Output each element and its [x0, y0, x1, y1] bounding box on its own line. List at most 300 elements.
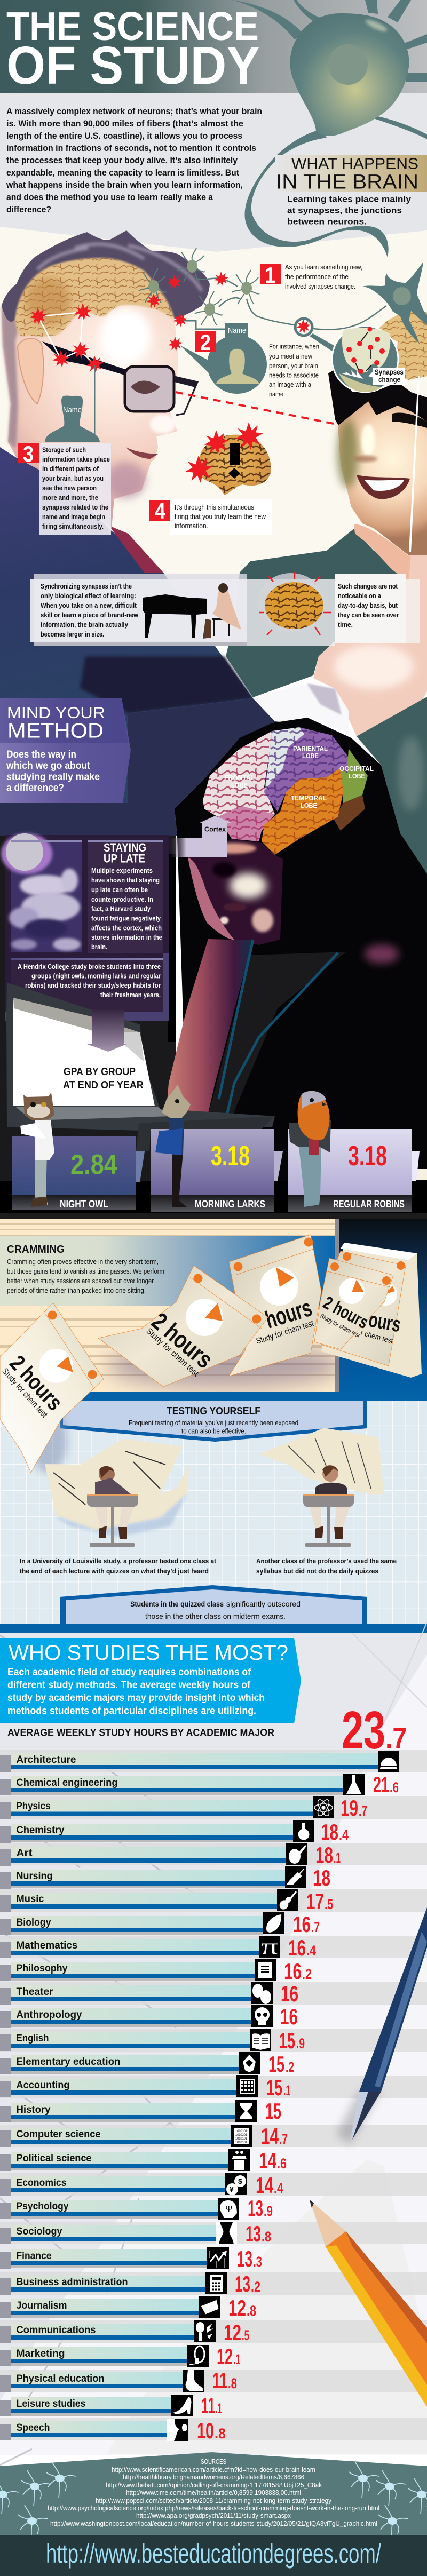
calendar sheet C	[229, 1235, 321, 1376]
teal garment at right	[357, 697, 427, 875]
text: synchronizing synapses: When you take on a new, difficult	[41, 601, 137, 609]
text: such changes: they can be seen over	[338, 611, 399, 619]
bar: Communications 12.5: 12	[224, 2320, 241, 2345]
panel: staying up late: fact, a Harvard study	[91, 905, 151, 912]
bar: English 15.9: English	[16, 2033, 49, 2044]
step 2 text: needs to associate	[269, 371, 319, 379]
panel: staying up late: Multiple experiments	[91, 866, 153, 874]
step 1 label	[260, 263, 362, 290]
bar: Philosophy 16.2	[0, 1959, 312, 1984]
testing yourself backdrop	[0, 1392, 427, 1624]
cramming backdrop	[0, 1219, 427, 1401]
bar: Physical education 11.8: .8	[228, 2375, 237, 2391]
bar: English 15.9: 15	[279, 2028, 295, 2053]
calendar sheet: front of pad	[314, 1258, 393, 1349]
lobe labels: FRONTAL	[224, 774, 255, 782]
text: synchronizing synapses: only biological effect of learning:	[41, 592, 136, 600]
bar: Art 18.1: Art	[16, 1848, 33, 1859]
calendar sheet B	[98, 1266, 268, 1387]
bar: Communications 12.5	[0, 2320, 427, 2345]
panel: who studies the most: different study methods. The average weekly hours of	[7, 1680, 251, 1691]
text: Louisville study	[20, 1557, 397, 1575]
panel: who studies the most: Each academic field of study requires combinations of	[7, 1667, 251, 1678]
step 4: firing that you truly learn the new	[175, 512, 266, 521]
bar: Computer science 14.7: 14	[261, 2124, 279, 2149]
bar: Mathematics 16.4: Mathematics	[16, 1940, 78, 1951]
neurons between the two people	[139, 248, 427, 344]
bar: Political science 14.6: .6	[277, 2156, 287, 2172]
text: such changes: noticeable on a	[338, 592, 382, 600]
lobe labels	[224, 745, 374, 809]
calendar sheet C: Study for chem test	[255, 1319, 315, 1346]
blue divider	[0, 1624, 427, 1633]
step 2: name and image: 2	[200, 330, 211, 355]
bar: Leisure studies 11.1: 11	[201, 2393, 215, 2418]
temporal lobe	[262, 768, 343, 855]
sources panel: http://healthlibrary.brighamandwomens.org/RelatedItems/6,667866	[123, 2473, 304, 2481]
sources panel: http://www.psychologicalscience.org/index.php/news/releases/back-to-school-cramming-doesnt-work-in-the-long-run.html	[48, 2504, 379, 2512]
cuff shadow	[307, 683, 342, 715]
panel: who studies the most	[0, 1638, 301, 1723]
bar: Journalism 12.8: Journalism	[16, 2300, 67, 2311]
text: synchronizing synapses: skill or learn a piece of brand-new	[41, 611, 139, 619]
callout: quizzed class result: Students in the quizzed class	[130, 1600, 224, 1608]
panel: mind your method	[0, 698, 131, 803]
intro paragraph: the processes that keep your body alive. It’s also infinitely	[6, 155, 238, 165]
illustration: pen	[336, 1907, 427, 2145]
banner: testing yourself: to can also be effective.	[181, 1427, 246, 1435]
white line	[409, 376, 420, 552]
panel: staying up late: affects the cortex, which	[91, 924, 162, 932]
eye	[131, 380, 160, 394]
step 4: It’s through this simultaneous	[175, 503, 254, 511]
bar: Anthropology 16: 16	[280, 2004, 298, 2029]
intro paragraph: information in fractions of seconds, not to mention it controls	[6, 143, 256, 153]
lobe labels: LOBE	[301, 802, 317, 809]
text: such changes: day-to-day basis, but	[338, 601, 398, 609]
bar: Philosophy 16.2: .2	[302, 1966, 312, 1982]
step 3: Storage of such	[42, 446, 86, 454]
icon: growing brain	[257, 572, 331, 635]
bar: Art 18.1: .1	[334, 1850, 341, 1866]
bar: Physical education 11.8: Physical education	[16, 2373, 105, 2384]
text: synchronizing synapses: information, the brain actually	[41, 621, 129, 629]
frontal lobe	[203, 731, 275, 841]
intro paragraph: is. With more than 90,000 miles of fibers (that’s almost the	[6, 118, 243, 129]
bar: Nursing 18	[0, 1865, 330, 1890]
step 3: 3	[23, 441, 34, 466]
panel: staying up late	[1, 833, 169, 1021]
step 2 text: you meet a new	[269, 352, 313, 360]
bar: Communications 12.5: Communications	[16, 2325, 96, 2336]
text: learning takes place at synapses: Learning takes place mainly	[287, 195, 411, 204]
bar: Biology 16.7: .7	[311, 1919, 320, 1935]
step 2 text: name.	[269, 390, 285, 398]
text: Hendrix college study	[18, 963, 161, 999]
sources panel: http://www.apa.org/gradpsych/2011/11/study-smart.aspx	[136, 2511, 291, 2519]
arm	[313, 550, 427, 736]
step 3: your brain, but as you	[42, 474, 104, 482]
heading: what happens in the brain: IN THE BRAIN	[276, 171, 418, 193]
bar: Journalism 12.8	[0, 2295, 256, 2320]
bar: Elementary education 15.2: .2	[286, 2059, 294, 2075]
bar: Business administration 13.2: 13	[235, 2271, 250, 2296]
step 3: information takes place	[42, 455, 110, 463]
text: Louisville study: In a University of Louisville study, a professor tested one class at	[20, 1557, 217, 1565]
title	[6, 4, 260, 96]
bar: Business administration 13.2: .2	[251, 2279, 260, 2295]
figure: robin student	[289, 1091, 331, 1207]
panel: mind your method: studying really make	[6, 772, 100, 783]
sources panel: SOURCES	[201, 2458, 226, 2466]
step 2: name and image	[168, 313, 267, 394]
bar: morning larks 3.18: 3.18	[211, 1141, 250, 1172]
ear	[18, 338, 43, 404]
bar: regular robins 3.18: REGULAR ROBINS	[333, 1199, 405, 1210]
occipital lobe	[341, 749, 368, 803]
bar: Architecture 23.7	[0, 1700, 427, 1772]
text: learning takes place at synapses: at synapses, the junctions	[287, 206, 402, 216]
text: cramming	[7, 1244, 164, 1294]
lower-left navy and sleeve	[0, 698, 299, 836]
title: OF STUDY	[6, 36, 260, 96]
face	[2, 288, 178, 529]
glasses lens	[125, 367, 174, 411]
panel: staying up late: up late can often be	[91, 886, 148, 894]
calendar pad	[320, 1243, 422, 1378]
intro paragraph: expandable, meaning the capacity to learn is limitless. But	[6, 168, 239, 178]
bar: Physics 19.7: .7	[359, 1803, 367, 1819]
dashed eye-line	[176, 392, 334, 424]
nose	[361, 424, 375, 456]
bar: Accounting 15.1: 15	[266, 2075, 282, 2100]
bar: Economics 14.4: $	[238, 2177, 242, 2185]
sources panel: http://www.popsci.com/scitech/article/2008-11/cramming-not-long-term-study-strategy	[96, 2497, 331, 2505]
bar: Speech 10.8	[0, 2418, 427, 2443]
callout: quizzed class result: significantly outscored	[226, 1600, 301, 1608]
page background: top section	[0, 0, 427, 256]
bar: Political science 14.6: 14	[259, 2148, 276, 2173]
fingers	[354, 524, 411, 582]
shirt front in dark grey	[192, 952, 346, 1182]
bar: Nursing 18: Nursing	[16, 1871, 52, 1882]
bar: Computer science 14.7: 1010101	[235, 2141, 248, 2144]
bar: Computer science 14.7: .7	[279, 2131, 288, 2147]
bar: Finance 13.3	[0, 2246, 262, 2271]
panel: who studies the most: methods students of particular disciplines are utilizing.	[7, 1705, 256, 1717]
bar: Elementary education 15.2: Elementary education	[16, 2056, 121, 2068]
bar: Nursing 18: 18	[313, 1865, 330, 1890]
bar: Mathematics 16.4: π	[261, 1935, 278, 1959]
text: such changes: time.	[338, 621, 353, 629]
title: THE SCIENCE	[6, 4, 259, 49]
bar: Accounting 15.1: .1	[283, 2082, 290, 2098]
bar: Psychology 13.9: 13	[248, 2196, 263, 2221]
arm	[160, 939, 253, 1182]
student with papers: right	[259, 1428, 384, 1547]
bar: Physical education 11.8	[0, 2368, 427, 2393]
panel: mind your method: MIND YOUR	[7, 704, 105, 722]
bar: Psychology 13.9: Psychology	[16, 2201, 69, 2212]
bar: Architecture 23.7: .7	[385, 1721, 407, 1755]
far lens	[175, 377, 197, 415]
heading: GPA by group: GPA BY GROUP	[64, 1066, 136, 1078]
step 3	[18, 441, 111, 535]
heading: what happens in the brain: WHAT HAPPENS	[291, 156, 418, 173]
bar: Music 17.5: .5	[325, 1896, 333, 1912]
bar: regular robins 3.18: 3.18	[348, 1141, 387, 1172]
bar: Architecture 23.7: 23	[342, 1700, 385, 1760]
exposed brain	[15, 258, 175, 337]
bar: Accounting 15.1: Accounting	[16, 2080, 69, 2091]
step 1 label: 1	[265, 263, 275, 288]
bar: Sociology 13.8: Sociology	[16, 2226, 62, 2237]
bar: Mathematics 16.4	[0, 1935, 427, 1960]
bar: Journalism 12.8: 12	[228, 2295, 246, 2320]
text: cramming: better when study sessions are spaced out over longer	[7, 1277, 154, 1285]
laptop	[6, 983, 275, 1131]
bar: morning larks 3.18: MORNING LARKS	[195, 1199, 265, 1210]
intro paragraph: and does the method you use to learn really make a	[6, 192, 213, 202]
intro paragraph	[6, 106, 262, 214]
figure: owl student	[20, 1093, 54, 1207]
bar: Art 18.1: 18	[315, 1842, 333, 1867]
bar: Chemistry 18.4	[0, 1819, 349, 1844]
heading: GPA by group	[63, 1066, 144, 1091]
bar: Physics 19.7: Physics	[16, 1801, 50, 1812]
bar: Computer science 14.7: Computer science	[16, 2129, 100, 2140]
bar: Biology 16.7: Biology	[16, 1917, 51, 1928]
bar: morning larks 3.18	[151, 1085, 274, 1212]
bar: Philosophy 16.2: 16	[284, 1959, 302, 1984]
bar: Finance 13.3: .3	[253, 2254, 262, 2270]
step 4	[149, 498, 272, 535]
callout: quizzed class result	[60, 1585, 367, 1624]
bar: Mathematics 16.4: .4	[306, 1943, 316, 1959]
text: learning takes place at synapses: between neurons.	[287, 218, 367, 226]
text: such changes: Such changes are not	[338, 582, 398, 590]
bar: Leisure studies 11.1: Leisure studies	[16, 2398, 85, 2410]
arrow: down to GPA	[87, 1009, 126, 1052]
cheek shadow	[337, 419, 359, 488]
heading: what happens in the brain	[275, 155, 427, 193]
footer	[0, 2535, 427, 2576]
bar: Philosophy 16.2: Philosophy	[16, 1963, 68, 1974]
large neuron at right	[362, 262, 427, 344]
smile	[357, 475, 410, 499]
bar: night owl 2.84: NIGHT OWL	[60, 1199, 108, 1210]
panel: staying up late: counterproductive. In	[91, 895, 153, 903]
hair highlights	[37, 244, 202, 291]
step 2: name and image: Name	[228, 326, 246, 335]
bar: Chemistry 18.4: .4	[339, 1827, 349, 1843]
bar: Chemistry 18.4: Chemistry	[16, 1825, 65, 1836]
firing synapses on man's head	[29, 303, 104, 373]
synapse change detail: change	[378, 376, 400, 384]
panel: staying up late: UP LATE	[104, 852, 145, 865]
panel: who studies the most: WHO STUDIES THE MOST?	[9, 1641, 288, 1665]
calendar sheet A: Study for chem test	[0, 1366, 49, 1420]
tie	[109, 526, 163, 573]
text: cramming: Cramming often proves effective in the very short term,	[7, 1258, 159, 1266]
panel: staying up late: found fatigue negatively	[91, 915, 161, 922]
figure: lark student	[155, 1085, 191, 1207]
banner: testing yourself: Frequent testing of material you’ve just recently been exposed	[129, 1419, 298, 1427]
banner: testing yourself	[60, 1401, 367, 1442]
bar: Speech 10.8: Speech	[16, 2422, 50, 2434]
sources panel: http://www.time.com/time/health/article/0,8599,1903838,00.html	[126, 2488, 301, 2497]
text: synchronizing synapses: becomes larger in size.	[41, 630, 104, 638]
text: Hendrix college study: groups (night owls, morning larks and regular	[31, 972, 161, 980]
decorative neurons	[0, 2462, 427, 2540]
step 3: name and image begin	[42, 513, 105, 521]
bar: Chemical engineering 21.6: 21	[373, 1772, 389, 1797]
neck and back-of-head shade	[2, 306, 21, 448]
bar: Economics 14.4: Economics	[16, 2177, 66, 2189]
panel: staying up late: stores information in the	[91, 933, 162, 941]
bar: Political science 14.6: Political science	[16, 2153, 92, 2164]
step 2 text	[269, 343, 319, 398]
intro paragraph: what happens inside the brain when you learn information,	[6, 180, 243, 190]
bar: regular robins 3.18	[288, 1091, 412, 1212]
calendar pad: r chem test	[360, 1328, 394, 1345]
lobe labels: OCCIPITAL	[339, 765, 374, 773]
illustration: head with coloured brain	[160, 727, 399, 1182]
bar: Anthropology 16	[0, 2004, 298, 2029]
bar: Finance 13.3: Finance	[16, 2251, 51, 2262]
bar: Biology 16.7: 16	[293, 1912, 311, 1937]
bar: Anthropology 16: Anthropology	[16, 2009, 82, 2021]
text: Hendrix college study: robins) and tracked their study/sleep habits for	[25, 981, 161, 989]
brain darker folds	[26, 277, 70, 325]
arm highlight	[334, 645, 414, 689]
hair	[328, 368, 427, 425]
bar: Journalism 12.8: .8	[247, 2303, 256, 2319]
calendar sheet A	[0, 1303, 104, 1473]
hair	[2, 230, 210, 322]
bar: Marketing 12.1: 12	[217, 2344, 233, 2369]
bar: History 15: 15	[265, 2098, 281, 2124]
panel: mind your method: METHOD	[7, 719, 104, 743]
black strip	[168, 854, 176, 1042]
panel: brain growth	[30, 572, 420, 646]
panel: staying up late: brain.	[91, 943, 107, 951]
shoulder light	[365, 944, 399, 964]
bar: Physical education 11.8: 11	[212, 2368, 227, 2393]
text: synchronizing synapses	[41, 582, 139, 638]
eye and brow	[392, 412, 427, 428]
cream background	[0, 227, 427, 598]
bar: Political science 14.6	[0, 2148, 287, 2173]
hand	[188, 857, 235, 940]
banner: testing yourself: TESTING YOURSELF	[167, 1405, 260, 1417]
lobe labels: LOBE	[302, 752, 319, 760]
step 4: 4	[155, 498, 166, 523]
step 1 label: As you learn something new,	[285, 263, 362, 271]
bar: Biology 16.7	[0, 1912, 320, 1937]
bar: Speech 10.8: 10	[197, 2418, 214, 2443]
calendar sheet B: 2 hours	[147, 1307, 218, 1374]
bar: Theater 16	[0, 1981, 427, 2006]
bar: Chemical engineering 21.6: .6	[390, 1779, 399, 1795]
face	[338, 397, 427, 555]
heading: GPA by group: AT END OF YEAR	[63, 1079, 144, 1091]
step 2 text: For instance, when	[269, 343, 319, 350]
bar: English 15.9: .9	[296, 2036, 305, 2052]
calendar sheet C: hours	[262, 1293, 315, 1334]
bar: Computer science 14.7	[0, 2124, 427, 2149]
panel: staying up late: have shown that staying	[91, 876, 160, 884]
nose	[150, 415, 176, 434]
bar: Music 17.5: Music	[16, 1894, 44, 1905]
bar: Economics 14.4: .4	[274, 2180, 283, 2196]
bar: Sociology 13.8: .8	[262, 2229, 271, 2245]
cortex arrow	[169, 816, 233, 857]
silhouette with name: Name	[63, 406, 82, 415]
jaw shade	[105, 462, 146, 498]
bar: Theater 16: 16	[281, 1981, 298, 2006]
silhouette with name	[45, 365, 100, 442]
image: moon and clouds	[1, 833, 82, 952]
sources panel: http://www.washingtonpost.com/local/education/number-of-hours-students-study/2012/05/21/gIQA3viTgU_graphic.html	[50, 2519, 377, 2527]
parietal lobe	[264, 727, 349, 812]
text: cramming: CRAMMING	[7, 1244, 65, 1255]
step 3: in different parts of	[42, 465, 99, 473]
step 1 label: the performance of the	[285, 273, 349, 281]
calendar sheet: front of pad: 2 hours	[320, 1293, 372, 1333]
bar: Elementary education 15.2: 15	[268, 2052, 284, 2077]
left background dark	[0, 836, 176, 1188]
dark backdrop of method section	[0, 697, 427, 1188]
text: Louisville study: Another class of the professor’s used the same	[256, 1557, 397, 1565]
bar: night owl 2.84: 2.84	[70, 1149, 117, 1180]
bar: Economics 14.4: 14	[256, 2173, 273, 2198]
bar: Marketing 12.1: Marketing	[16, 2348, 65, 2359]
bar: Marketing 12.1	[0, 2344, 240, 2369]
text: Hendrix college study: A Hendrix College study broke students into three	[18, 963, 161, 971]
title banner	[0, 0, 427, 93]
bar: Psychology 13.9: Ψ	[225, 2204, 233, 2214]
calendar sheet A: 2 hours	[5, 1350, 68, 1415]
panel: mind your method: Does the way in	[6, 749, 76, 760]
panel: mind your method: which we go about	[6, 760, 91, 772]
bar: Physics 19.7: 19	[341, 1795, 358, 1820]
cortex arrow: Cortex	[204, 825, 226, 833]
bar: Business administration 13.2: Business administration	[16, 2277, 128, 2288]
bar: Computer science 14.7: 1010101	[235, 2137, 248, 2141]
bar: Psychology 13.9: .9	[264, 2203, 273, 2219]
collar lines	[219, 940, 338, 1115]
calendar sheet: front of pad: Study for chem test	[319, 1312, 361, 1339]
synapse change detail	[295, 319, 405, 392]
step 2 text: person, your brain	[269, 362, 318, 370]
bar: Leisure studies 11.1	[0, 2393, 222, 2418]
lobe labels: PARIENTAL	[293, 745, 328, 752]
step 3: firing simultaneously.	[42, 522, 104, 530]
sources panel: http://www.thebatt.com/opinion/calling-off-cramming-1.1778158#.UbjT25_C8ak	[106, 2481, 322, 2489]
bar: night owl 2.84	[12, 1093, 136, 1210]
step 4: information.	[175, 522, 208, 530]
step 3: synapses related to the	[42, 503, 108, 511]
text: such changes	[338, 582, 399, 629]
step 1 label: involved synapses change.	[285, 282, 355, 290]
suit	[0, 447, 253, 836]
sources panel	[0, 2452, 427, 2540]
blouse	[226, 529, 408, 697]
bar: Physics 19.7	[0, 1795, 427, 1820]
icon: pianist	[143, 583, 241, 639]
panel: mind your method: a difference?	[6, 782, 64, 794]
